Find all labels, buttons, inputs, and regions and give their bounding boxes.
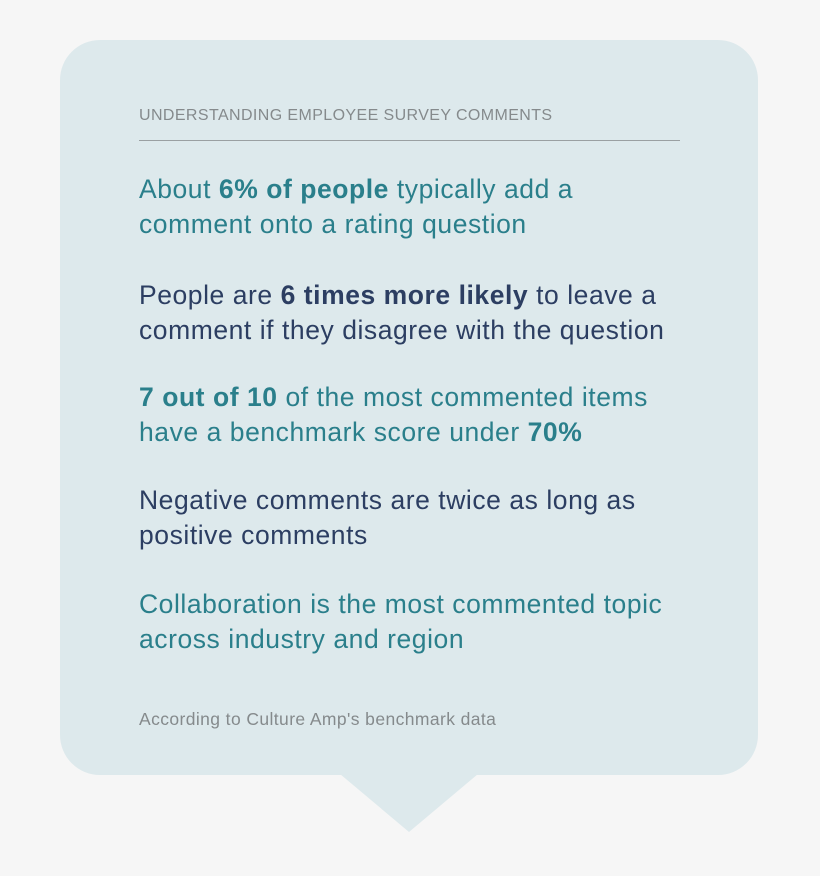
heading: UNDERSTANDING EMPLOYEE SURVEY COMMENTS xyxy=(139,107,552,124)
stat 4 xyxy=(139,485,636,550)
stat 3: have a benchmark score under 70% xyxy=(139,417,582,447)
stat 5 xyxy=(139,589,662,654)
speech bubble xyxy=(60,40,758,775)
stat 5: Collaboration is the most commented topic xyxy=(139,589,662,619)
stat 4: positive comments xyxy=(139,520,368,550)
stat 3: 7 out of 10 of the most commented items xyxy=(139,382,648,412)
stat 3 xyxy=(139,382,648,447)
stat 1 xyxy=(139,174,573,239)
stat 4: Negative comments are twice as long as xyxy=(139,485,636,515)
stat 1: About 6% of people typically add a xyxy=(139,174,573,204)
stat 2: comment if they disagree with the question xyxy=(139,315,664,345)
stat 2 xyxy=(139,280,664,345)
stat 1: comment onto a rating question xyxy=(139,209,527,239)
footer source: According to Culture Amp's benchmark data xyxy=(139,709,496,729)
stat 2: People are 6 times more likely to leave a xyxy=(139,280,657,310)
stat 5: across industry and region xyxy=(139,624,464,654)
